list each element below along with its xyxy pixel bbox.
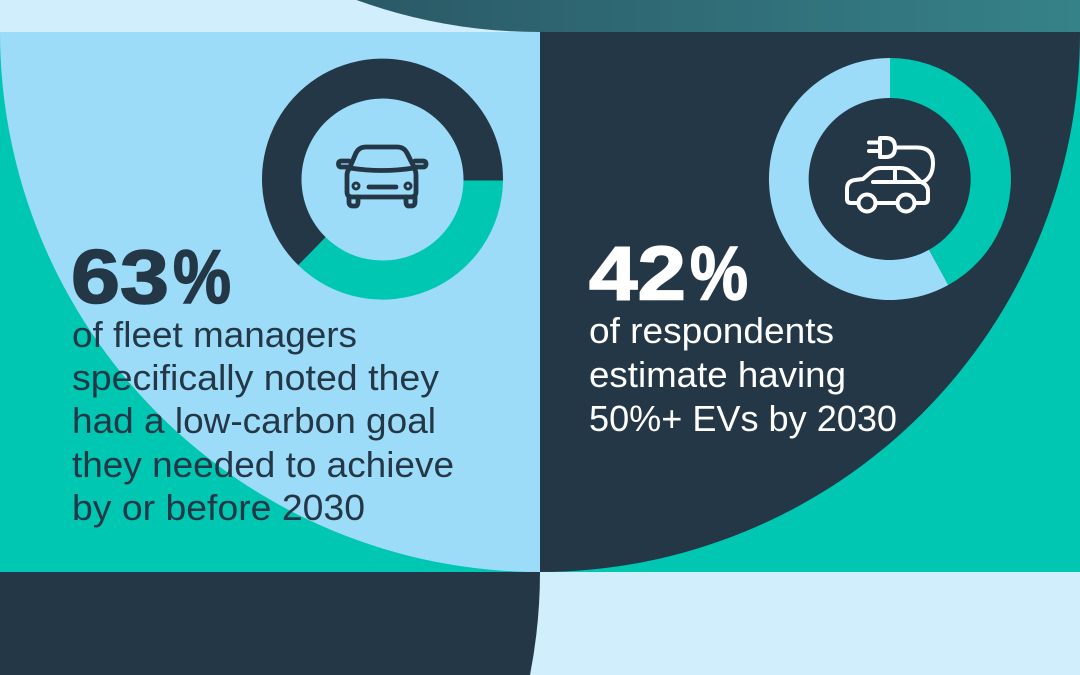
stat: 63% xyxy=(71,235,231,320)
stat: 63%: % xyxy=(173,235,231,320)
text: fleet manager description: they needed to achieve xyxy=(72,444,454,485)
stat: 63%: 63 xyxy=(71,235,169,320)
text: fleet manager description: by or before 2030 xyxy=(72,487,365,528)
stat: 42% xyxy=(589,232,748,316)
text: fleet manager description: had a low-carbon goal xyxy=(72,400,436,441)
panel: respondents xyxy=(540,32,1080,572)
text: fleet manager description: of fleet managers xyxy=(72,314,357,355)
icon: electric car with plug xyxy=(847,138,933,212)
donut chart: 63% xyxy=(262,59,503,300)
text: fleet manager description: specifically noted they xyxy=(72,357,439,398)
text: respondents description xyxy=(589,310,897,439)
stat: 42%: % xyxy=(690,232,748,316)
text: respondents description: of respondents xyxy=(589,310,834,351)
panel: fleet managers xyxy=(0,32,540,572)
bottom band xyxy=(0,572,1080,675)
stat: 42%: 42 xyxy=(589,232,686,316)
text: respondents description: 50%+ EVs by 2030 xyxy=(589,398,897,439)
text: respondents description: estimate having xyxy=(589,354,846,395)
text: fleet manager description xyxy=(72,314,454,528)
icon: car front xyxy=(338,147,426,206)
top band xyxy=(0,0,1080,33)
donut chart: 42% xyxy=(769,58,1011,300)
